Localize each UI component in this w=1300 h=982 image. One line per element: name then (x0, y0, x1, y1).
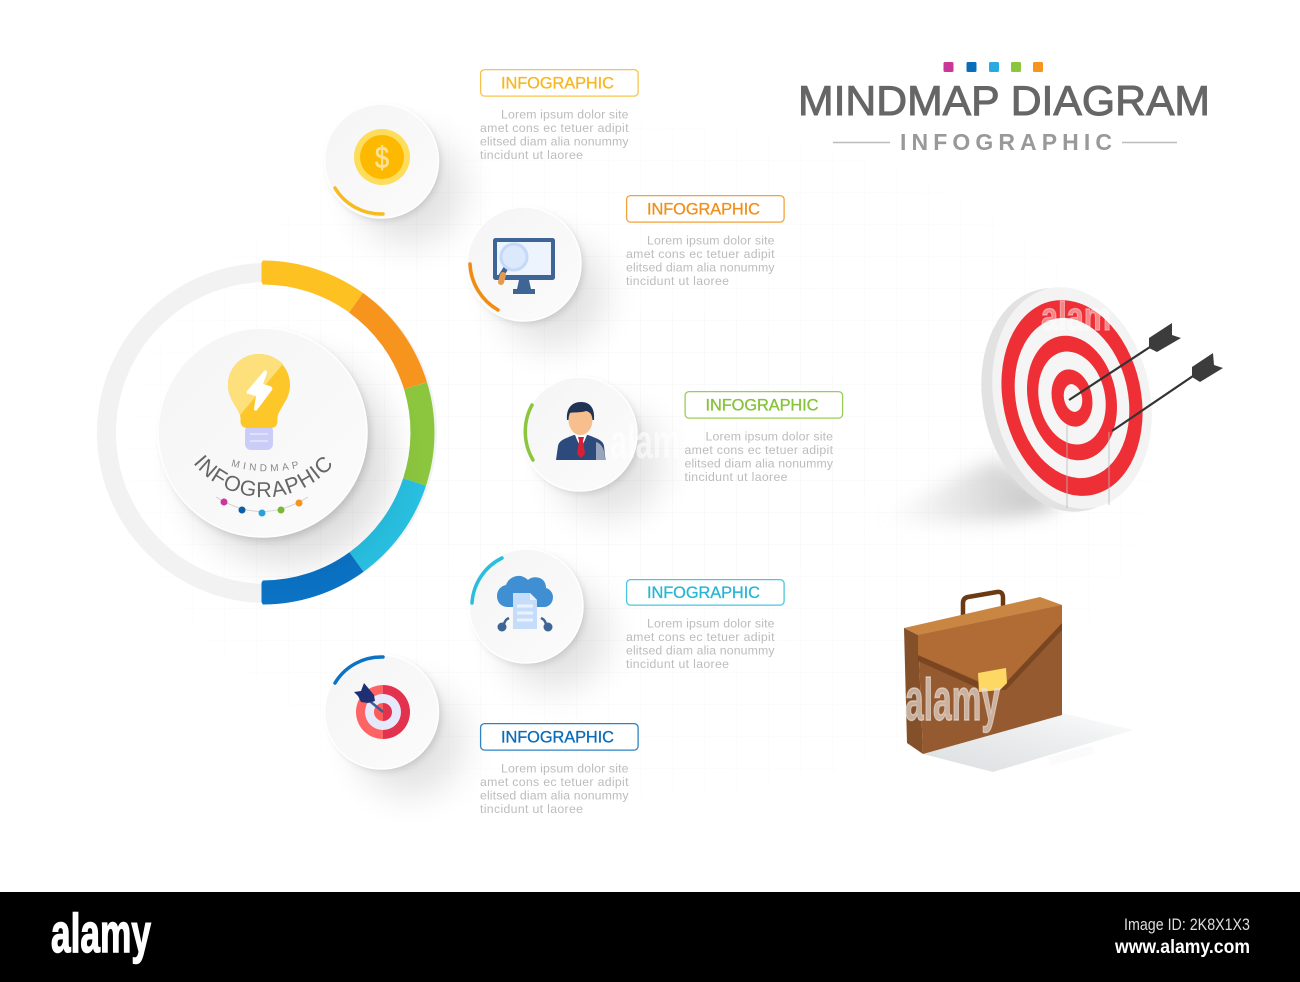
callout 1: INFOGRAPHIC (501, 74, 614, 92)
icon: businessman (556, 402, 606, 460)
watermark behind person: alam (610, 416, 680, 469)
curved label: mindmap: MINDMAP (232, 460, 298, 472)
callout 4: INFOGRAPHIC (647, 584, 760, 602)
website: www.alamy.com (1114, 937, 1250, 958)
callout 1: amet cons ec tetuer adipit (480, 121, 629, 135)
progress arc: yellow (335, 188, 383, 214)
icon: light bulb (228, 354, 290, 450)
callout 3: tincidunt ut laoree (684, 470, 788, 484)
callout 4: tincidunt ut laoree (626, 657, 729, 671)
ring segment: blue (262, 562, 356, 592)
callout 4: elitsed diam alia nonummy (626, 644, 775, 658)
ring segment: orange (356, 303, 416, 386)
callout 3: elitsed diam alia nonummy (684, 456, 834, 470)
ring segment: cyan (356, 482, 415, 562)
callout 5: INFOGRAPHIC (501, 728, 614, 746)
footer bar (0, 892, 1300, 982)
callout 4: amet cons ec tetuer adipit (626, 630, 775, 644)
callout 5: elitsed diam alia nonummy (480, 788, 629, 802)
node 5: dart target (324, 655, 464, 795)
progress arc: blue (335, 657, 383, 683)
ring segment: yellow (262, 272, 356, 303)
callout 2: INFOGRAPHIC (647, 200, 760, 218)
node 1: finance (324, 104, 464, 244)
watermark on briefcase: alamy (905, 667, 1000, 733)
callout 1 (480, 70, 638, 162)
watermark on target: alam (1041, 295, 1111, 339)
node 4: cloud document (469, 549, 608, 689)
grey ring (106, 272, 428, 594)
garland of dots (216, 497, 308, 516)
callout 5: tincidunt ut laoree (480, 802, 583, 816)
arrow 1 (1069, 323, 1181, 400)
callout 5: Lorem ipsum dolor site (501, 762, 629, 776)
illustration: briefcase (904, 592, 1133, 772)
watermark (610, 295, 1111, 733)
image id: Image ID: 2K8X1X3 (1124, 915, 1250, 934)
callout 2: tincidunt ut laoree (626, 274, 729, 288)
callout 3: amet cons ec tetuer adipit (684, 443, 834, 457)
arrow 2 (1112, 353, 1223, 431)
icon: dart board (354, 683, 410, 739)
callout 4: Lorem ipsum dolor site (647, 616, 775, 630)
curved label: infographic: INFOGRAPHIC (194, 454, 332, 498)
callout 2 (626, 196, 784, 288)
node 2: monitor (467, 207, 606, 347)
ring segment: green (415, 386, 422, 482)
node 3: person (523, 377, 662, 517)
central hub (159, 329, 402, 574)
handle (963, 592, 1003, 618)
callout 2: elitsed diam alia nonummy (626, 260, 775, 274)
colour squares (944, 62, 1043, 72)
heading: mindmap diagram: MINDMAP DIAGRAM (798, 77, 1210, 124)
target shadow (880, 460, 1060, 522)
illustration: archery target (880, 272, 1223, 527)
progress arc: cyan (472, 558, 502, 603)
progress arc: green (525, 405, 533, 460)
callout 3: INFOGRAPHIC (706, 396, 819, 414)
central ring (106, 260, 428, 604)
callout 1: tincidunt ut laoree (480, 148, 583, 162)
callout 1: elitsed diam alia nonummy (480, 134, 629, 148)
subheading: infographic: INFOGRAPHIC (900, 129, 1112, 155)
callout 2: Lorem ipsum dolor site (647, 234, 775, 248)
callout 1: Lorem ipsum dolor site (501, 108, 629, 122)
briefcase shadow (923, 713, 1133, 772)
footer logo: alamy (51, 902, 151, 964)
progress arc: orange (470, 264, 498, 310)
title block (798, 62, 1210, 155)
callout 2: amet cons ec tetuer adipit (626, 247, 775, 261)
callout 3 (684, 392, 843, 484)
callout 5 (480, 724, 638, 816)
icon: monitor with magnifier (493, 238, 555, 294)
icon: coin: $ (375, 140, 389, 175)
callout 3: Lorem ipsum dolor site (706, 430, 833, 444)
callout 5: amet cons ec tetuer adipit (480, 775, 629, 789)
icon: cloud with document (497, 576, 553, 632)
callout 4 (626, 580, 784, 671)
